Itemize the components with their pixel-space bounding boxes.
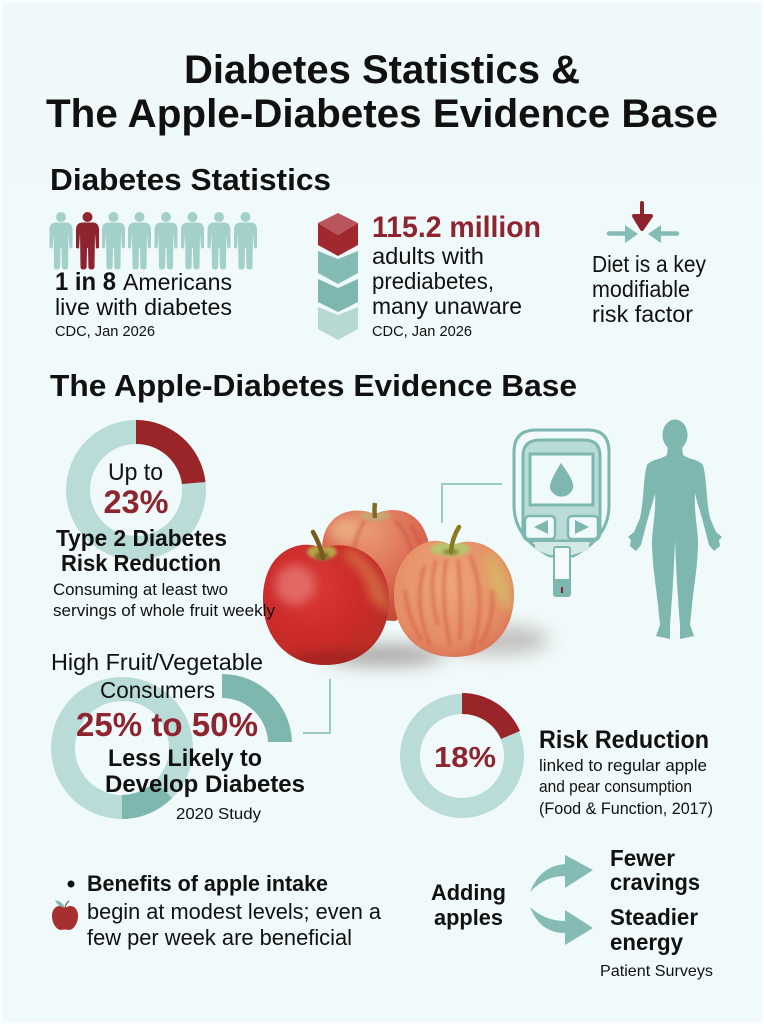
- text: 1 in 8 Americans: live with diabetes: [55, 294, 232, 320]
- text: adding apples: [431, 880, 506, 930]
- text: servings of whole fruit weekly: servings of whole fruit weekly: [53, 602, 276, 620]
- text: up to 23 percent: 23%: [104, 484, 168, 520]
- text: type 2 diabetes risk reduction: Type 2 Diabetes: [56, 525, 227, 551]
- text: benefits of apple intake: few per week are beneficial: [87, 925, 352, 950]
- text: high fruit vegetable consumers: Consumers: [100, 677, 215, 703]
- title: The Apple-Diabetes Evidence Base: [46, 92, 718, 136]
- text: risk reduction apple and pear: linked to regular apple: [539, 757, 707, 775]
- text: 115.2 million adults with prediabetes: many unaware: [372, 293, 522, 319]
- donut chart: 18 percent: [410, 693, 520, 808]
- text: adding apples: Adding: [431, 880, 506, 905]
- title: Diabetes Statistics &: [184, 48, 580, 92]
- text: risk reduction apple and pear: (Food & Function, 2017): [539, 800, 713, 818]
- text: up to 23 percent: [104, 459, 168, 520]
- connector line: lower donut: [303, 679, 330, 733]
- text: risk reduction apple and pear: [539, 726, 713, 818]
- donut chart: lower ring: [63, 674, 292, 819]
- text: 115.2 million adults with prediabetes: prediabetes,: [372, 268, 494, 294]
- photo: three apples: [258, 500, 550, 679]
- connector line: meter: [442, 484, 502, 523]
- text: diet is a key modifiable risk factor: [592, 251, 706, 327]
- icon: stacked blocks: [318, 213, 358, 340]
- donut chart: 18 percent: 18%: [434, 742, 496, 774]
- icon: three converging arrows: [609, 203, 677, 243]
- icon: row of eight people, one highlighted: [50, 212, 257, 270]
- text: type 2 diabetes risk reduction: Consuming at least two: [53, 581, 228, 599]
- text: 1 in 8 Americans: [55, 268, 232, 340]
- text: benefits of apple intake: Benefits of apple intake: [87, 871, 328, 896]
- arrow: up to fewer cravings: [530, 855, 593, 892]
- text: outcomes of adding apples: Steadier: [610, 904, 698, 930]
- text: 25 to 50 percent less likely: 25% to 50%: [76, 706, 258, 743]
- icon: human body silhouette: [628, 420, 722, 639]
- text: outcomes of adding apples: [600, 845, 713, 980]
- text: 25 to 50 percent less likely: Develop Diabetes: [105, 771, 305, 798]
- title: [46, 48, 718, 136]
- text: 1 in 8 Americans: Americans: [123, 269, 232, 295]
- text: 115.2 million adults with prediabetes: CDC, Jan 2026: [372, 323, 472, 340]
- arrow: down to steadier energy: [530, 907, 593, 945]
- text: risk reduction apple and pear: and pear consumption: [539, 778, 692, 796]
- text: up to 23 percent: Up to: [108, 459, 163, 486]
- text: 115.2 million adults with prediabetes: 115.2 million: [372, 211, 541, 244]
- text: type 2 diabetes risk reduction: Risk Reduction: [61, 550, 221, 576]
- text: type 2 diabetes risk reduction: [53, 525, 228, 599]
- text: benefits of apple intake: begin at modest levels; even a: [87, 899, 382, 924]
- text: outcomes of adding apples: cravings: [610, 869, 700, 895]
- text: 1 in 8 Americans: 1 in 8: [55, 268, 116, 296]
- text: outcomes of adding apples: Fewer: [610, 845, 675, 871]
- text: 115.2 million adults with prediabetes: [372, 211, 541, 340]
- text: diet is a key modifiable risk factor: modifiable: [592, 276, 690, 302]
- text: benefits of apple intake: [68, 871, 382, 950]
- text: 25 to 50 percent less likely: [76, 706, 305, 823]
- icon: small red apple: [52, 901, 78, 930]
- text: outcomes of adding apples: Patient Surveys: [600, 963, 713, 980]
- text: outcomes of adding apples: energy: [610, 929, 683, 955]
- text: 25 to 50 percent less likely: Less Likely to: [108, 745, 262, 772]
- heading: evidence base: The Apple-Diabetes Evidence Base: [50, 368, 577, 403]
- text: 1 in 8 Americans: CDC, Jan 2026: [55, 323, 155, 340]
- text: high fruit vegetable consumers: High Fruit/Vegetable: [51, 649, 263, 675]
- text: 25 to 50 percent less likely: 2020 Study: [176, 806, 261, 823]
- donut chart: 23 percent: [78, 420, 206, 548]
- text: risk reduction apple and pear: Risk Reduction: [539, 726, 709, 754]
- icon: glucose meter: [514, 430, 609, 596]
- text: diet is a key modifiable risk factor: Diet is a key: [592, 251, 706, 277]
- heading: diabetes statistics: Diabetes Statistics: [50, 162, 331, 197]
- text: diet is a key modifiable risk factor: risk factor: [592, 301, 693, 327]
- text: adding apples: apples: [434, 905, 503, 930]
- text: 115.2 million adults with prediabetes: adults with: [372, 243, 484, 269]
- text: high fruit vegetable consumers: [51, 649, 263, 703]
